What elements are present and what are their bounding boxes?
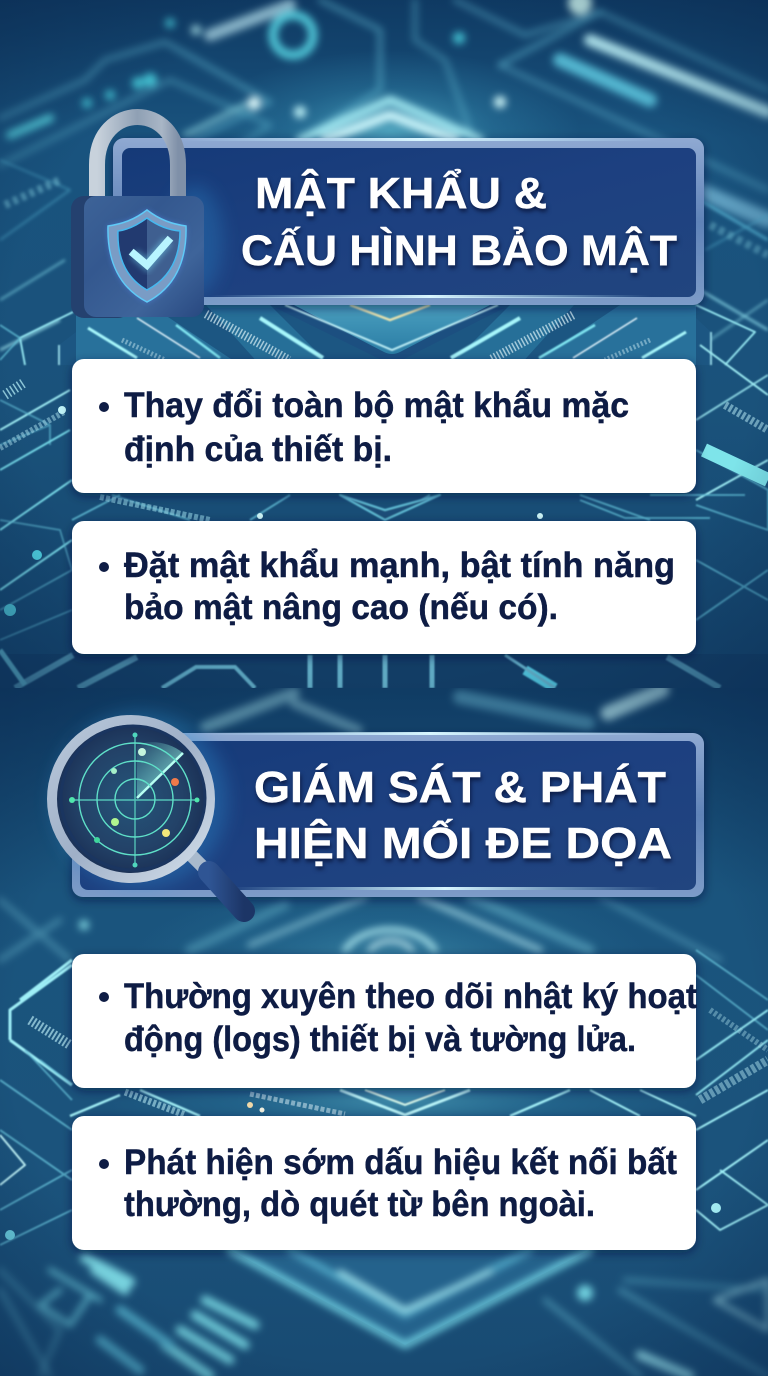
heading: password and security configuration: CẤU HÌNH BẢO MẬT: [241, 226, 677, 275]
card: strong passwords: bảo mật nâng cao (nếu có).: [124, 588, 558, 627]
heading: monitoring and threat detection: GIÁM SÁT & PHÁT: [254, 762, 666, 812]
icon: magnifying glass with radar: [52, 720, 244, 911]
card: change default passwords: định của thiết bị.: [124, 430, 392, 469]
card: detect anomalies: Phát hiện sớm dấu hiệu kết nối bất: [124, 1143, 677, 1182]
card: change default passwords: Thay đổi toàn bộ mật khẩu mặc: [124, 386, 629, 425]
banner: password and security configuration: [113, 138, 704, 305]
banner: monitoring and threat detection: [52, 712, 704, 897]
heading: password and security configuration: [241, 167, 677, 275]
panel: bottom background circuit board: [0, 688, 768, 1376]
heading: password and security configuration: MẬT KHẨU &: [255, 167, 547, 218]
radar display: [69, 732, 200, 868]
heading: monitoring and threat detection: HIỆN MỐI ĐE DỌA: [254, 817, 672, 868]
card: monitor logs: Thường xuyên theo dõi nhật ký hoạt: [124, 977, 697, 1016]
icon: shield check: [108, 210, 186, 302]
card: strong passwords: Đặt mật khẩu mạnh, bật tính năng: [124, 546, 675, 585]
card: change default passwords: [72, 359, 696, 493]
card: detect anomalies: [72, 1116, 696, 1250]
card: monitor logs: [72, 954, 697, 1088]
heading: monitoring and threat detection: [254, 762, 672, 868]
panel: top background circuit board: [0, 0, 768, 688]
card: strong passwords: [72, 521, 696, 654]
glowing chip platform under title: [59, 305, 711, 365]
card: monitor logs: động (logs) thiết bị và tường lửa.: [124, 1020, 636, 1059]
card: detect anomalies: thường, dò quét từ bên ngoài.: [124, 1185, 595, 1224]
icon: padlock with shield: [71, 117, 204, 318]
